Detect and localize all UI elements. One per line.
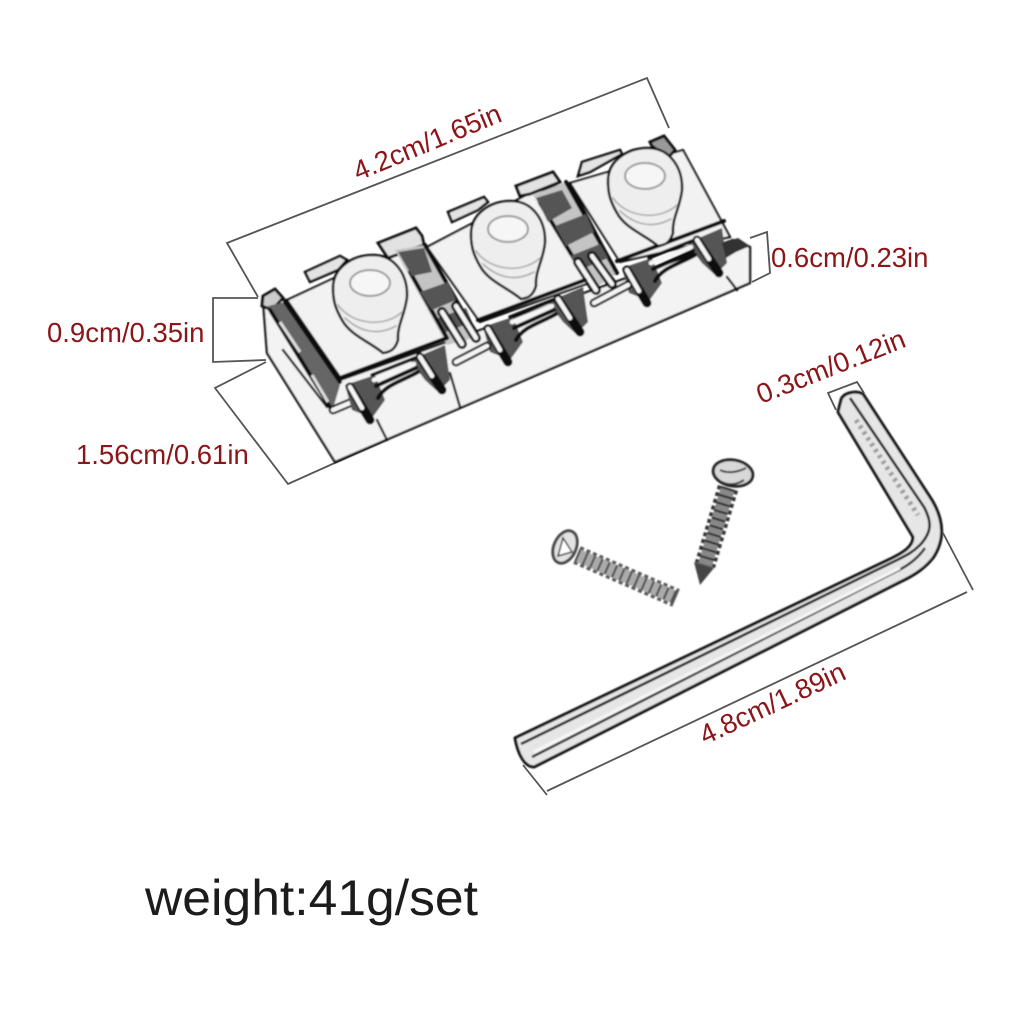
label: nut front height: 0.6cm/0.23in — [771, 242, 928, 273]
dimension bracket: nut height — [213, 298, 266, 362]
hex screw: middle — [471, 201, 545, 299]
label: hex key length: 4.8cm/1.89in — [694, 656, 850, 750]
dimension bracket: nut length — [227, 78, 669, 297]
clamp tabs along back edge — [262, 136, 675, 310]
dark clamp band: between plates one and two — [395, 245, 477, 345]
label: hex key width: 0.3cm/0.12in — [752, 323, 910, 410]
label: nut depth: 1.56cm/0.61in — [76, 439, 249, 470]
dimension bracket: nut depth — [215, 362, 386, 484]
nut top plate: middle — [427, 183, 617, 322]
dimension bracket: hex key width — [828, 382, 864, 410]
nut top plate: left — [287, 245, 447, 377]
nut front segment dividers — [283, 277, 737, 440]
front clamp unit: right — [617, 221, 727, 303]
weight note: weight:41g/set — [144, 870, 478, 926]
wood screw: near vertical — [694, 457, 755, 585]
front clamp unit: left — [333, 338, 450, 420]
wood screw: diagonal left — [548, 527, 676, 598]
hex key facet lines — [521, 398, 930, 744]
hex screw: right — [608, 148, 682, 246]
dimension bracket: hex key length — [523, 533, 973, 795]
dimension bracket: nut front height — [750, 232, 770, 282]
hex key — [515, 392, 942, 767]
locking nut — [262, 136, 750, 462]
nut body and front face — [263, 240, 750, 462]
rail connectors between clamp units — [456, 238, 750, 362]
hex key outer body — [515, 392, 942, 767]
hex screw: left — [333, 255, 407, 353]
nut top plate: right — [570, 150, 730, 262]
label: nut height: 0.9cm/0.35in — [47, 317, 204, 348]
front clamp unit: middle — [478, 280, 588, 362]
dark clamp band: left — [268, 302, 340, 412]
label: nut length: 4.2cm/1.65in — [348, 98, 506, 187]
dark clamp band: between plates two and three — [533, 182, 617, 290]
